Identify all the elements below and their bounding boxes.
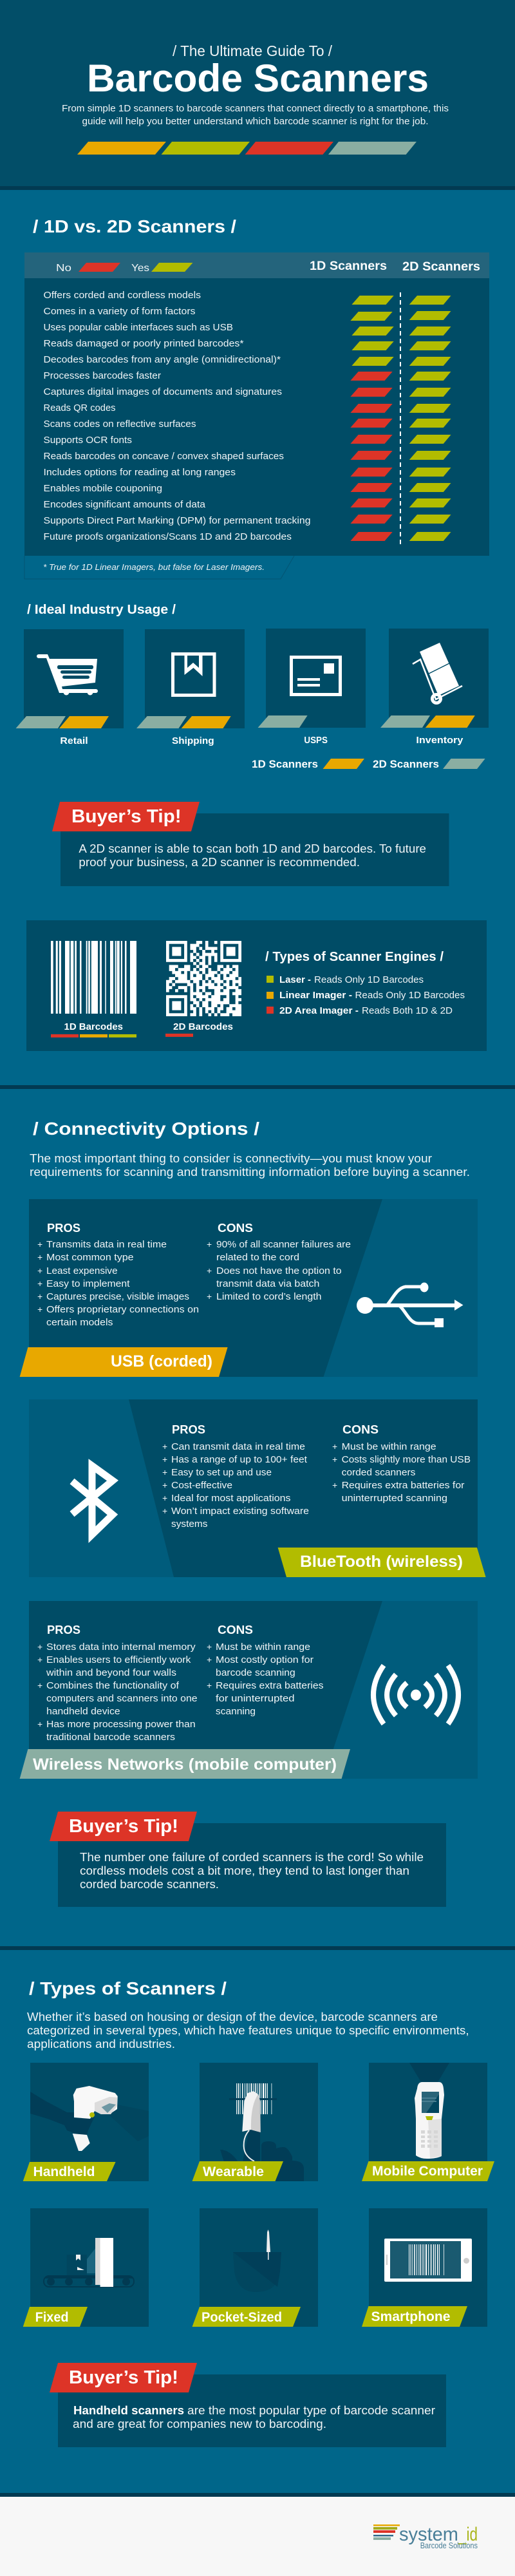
fixed scanner illustration [44,2238,134,2287]
icon: shopping cart [37,654,98,696]
wireless cons: Requires extra batteries [216,1680,323,1691]
card: inventory [380,629,489,746]
icon: USB [357,1283,464,1327]
wireless pros: + [37,1654,42,1665]
engine types: Linear Imager - [279,990,352,1001]
wireless pros: Combines the functionality of [46,1680,180,1691]
wearable scanner illustration [220,2083,304,2181]
feature list: Future proofs organizations/Scans 1D and 2D barcodes [44,531,292,542]
fixed tag [23,2307,88,2327]
barcode labels [51,1021,233,1037]
callout: buyer's tip 2: Buyer’s Tip! [69,1816,178,1837]
Bluetooth pros: + [162,1454,167,1464]
Bluetooth pros: Has a range of up to 100+ feet [171,1454,308,1465]
legend: scanner colours: 1D Scanners [252,758,318,770]
panel: wireless networks [20,1601,478,1779]
wireless cons: + [207,1654,212,1665]
USB pros: Transmits data in real time [46,1239,167,1250]
Bluetooth pros: systems [171,1519,207,1530]
feature list: Processes barcodes faster [44,370,161,381]
USB pros: Captures precise, visible images [46,1291,189,1302]
title: / The Ultimate Guide To / [173,43,333,59]
title: Barcode Scanners [87,57,429,100]
USB tag: USB (corded) [111,1352,212,1370]
1D scanner marks [350,296,394,541]
logo: system_id: _id [458,2524,478,2545]
types intro: categorized in several types, which have features unique to specific environments, [27,2024,469,2037]
engine types: 2D Area Imager - [279,1005,359,1016]
callout: buyer's tip 1: Buyer’s Tip! [71,806,182,827]
mobile computer illustration [409,2063,449,2159]
card: USPS [258,629,366,746]
heading: ideal industry usage: / Ideal Industry Usage / [27,603,176,617]
heading: connectivity: / Connectivity Options / [33,1119,259,1139]
feature list: Encodes significant amounts of data [44,499,206,510]
Bluetooth cons: + [332,1441,337,1452]
panel: USB [20,1199,478,1377]
callout: buyer's tip 3: and are great for companies new to barcoding. [73,2418,326,2430]
feature list: Enables mobile couponing [44,483,162,494]
Bluetooth cons: corded scanners [342,1467,415,1478]
heading: types of scanners: / Types of Scanners / [29,1978,227,1998]
feature list [44,290,310,542]
icon: 1D barcode [51,941,136,1014]
types intro: applications and industries. [27,2038,175,2050]
handheld scanner illustration [30,2086,149,2151]
USB cons: related to the cord [216,1252,299,1263]
wireless pros: + [37,1680,42,1690]
wireless tag: Wireless Networks (mobile computer) [33,1756,337,1774]
types intro: Whether it’s based on housing or design of the device, barcode scanners are [27,2011,438,2023]
callout: buyer's tip 3: Buyer’s Tip! [69,2367,178,2388]
Bluetooth cons: + [332,1480,337,1490]
handheld tag [23,2162,116,2181]
USB cons: + [207,1291,212,1302]
wireless cons [207,1624,323,1717]
USB pros: + [37,1291,42,1302]
panel: Bluetooth [29,1399,486,1577]
feature list: Reads damaged or poorly printed barcodes* [44,338,244,349]
icon: Bluetooth [72,1466,113,1535]
card: inventory: Inventory [416,735,464,746]
feature list: Reads QR codes [44,402,116,413]
header band [0,0,515,190]
feature list: Supports Direct Part Marking (DPM) for permanent tracking [44,515,310,526]
fixed tag: Fixed [35,2310,69,2325]
USB pros: + [37,1278,42,1289]
card: shipping: Shipping [172,735,214,746]
Bluetooth pros: Ideal for most applications [171,1493,291,1504]
table header: Yes [131,263,149,274]
engine types: Laser - [279,974,311,985]
icon: parcel [171,652,216,697]
wireless cons: + [207,1680,212,1690]
engine types: Reads Both 1D & 2D [362,1005,453,1016]
USB cons: 90% of all scanner failures are [216,1239,351,1250]
Bluetooth cons: Costs slightly more than USB [342,1454,471,1465]
callout: buyer's tip 3: Handheld scanners [73,2404,184,2417]
pocket tag [192,2307,301,2327]
wireless cons: Most costly option for [216,1654,314,1665]
engine types: Reads Only 1D Barcodes [355,990,465,1001]
wireless pros: Enables users to efficiently work [46,1654,191,1665]
tags [136,716,231,728]
USB pros: + [37,1239,42,1249]
connectivity intro: The most important thing to consider is connectivity—you must know your [30,1152,432,1165]
USB cons: + [207,1239,212,1249]
Bluetooth cons: + [332,1454,337,1464]
Bluetooth pros: Cost-effective [171,1480,232,1491]
feature list: Captures digital images of documents and signatures [44,386,282,397]
feature list: Offers corded and cordless models [44,290,201,301]
wireless pros: within and beyond four walls [46,1667,176,1678]
tags [380,715,475,728]
footnote [24,556,294,579]
card: shipping [136,629,245,746]
feature list: Comes in a variety of form factors [44,306,196,317]
mobile computer tag: Mobile Computer [372,2164,483,2179]
intro text: From simple 1D scanners to barcode scanners that connect directly to a smartphone, this [62,103,449,114]
connectivity intro [30,1152,470,1179]
wireless cons: Must be within range [216,1642,310,1653]
types intro [27,2011,469,2050]
footnote: * True for 1D Linear Imagers, but false for Laser Imagers. [43,562,265,572]
USB pros: + [37,1252,42,1262]
table header [24,252,489,278]
legend: scanner colours [252,758,485,770]
wireless pros: + [37,1719,42,1729]
pocket scanner illustration [233,2230,281,2292]
callout: buyer's tip 2 [50,1812,446,1907]
callout: buyer's tip 3: are the most popular type of barcode scanner [187,2404,435,2417]
USB pros: certain models [46,1317,113,1328]
wearable tag: Wearable [203,2164,264,2179]
icon: wireless signal [373,1665,458,1724]
colour bars [77,142,417,155]
Bluetooth pros: Easy to set up and use [171,1467,272,1478]
wireless pros: Has more processing power than [46,1719,196,1730]
logo: system_id: Barcode Solutions [420,2541,478,2550]
USB pros: + [37,1304,42,1314]
wireless cons: CONS [218,1624,253,1636]
wireless cons: + [207,1642,212,1652]
panel: comparison table [24,252,489,579]
Bluetooth cons [332,1423,471,1504]
wireless pros: + [37,1642,42,1652]
wireless pros: PROS [47,1624,80,1636]
feature list: Scans codes on reflective surfaces [44,419,196,430]
callout: buyer's tip 1: A 2D scanner is able to scan both 1D and 2D barcodes. To future [79,842,426,855]
Bluetooth tag: BlueTooth (wireless) [300,1553,463,1571]
card: handheld [23,2063,149,2181]
intro text: guide will help you better understand which barcode scanner is right for the job. [82,116,429,127]
icon: hand truck [413,643,462,703]
card: USPS: USPS [304,735,328,746]
card: pocket-sized [192,2208,318,2327]
feature list: Includes options for reading at long ranges [44,467,236,478]
callout: buyer's tip 1 [52,802,449,886]
USB pros: Least expensive [46,1265,118,1276]
wireless pros: Stores data into internal memory [46,1642,196,1653]
Bluetooth pros: + [162,1467,167,1477]
tags [15,716,109,728]
feature list: Uses popular cable interfaces such as USB [44,322,233,333]
Bluetooth pros: + [162,1480,167,1490]
feature list: Decodes barcodes from any angle (omnidirectional)* [44,354,281,365]
connectivity intro: requirements for scanning and transmitting information before buying a scanner. [30,1166,470,1179]
heading: 1D vs 2D: / 1D vs. 2D Scanners / [33,216,236,236]
panel: barcodes and engines [26,920,487,1051]
legend: scanner colours: 2D Scanners [373,758,439,770]
Bluetooth pros: + [162,1441,167,1452]
intro text [62,103,449,127]
USB cons [207,1222,351,1302]
engine types [265,950,465,1016]
USB cons: CONS [218,1222,253,1235]
smartphone tag: Smartphone [371,2309,451,2324]
wireless cons: scanning [216,1706,256,1717]
card: mobile computer [362,2063,494,2181]
smartphone tag [362,2306,467,2327]
Bluetooth pros: Won’t impact existing software [171,1506,309,1517]
table header: No [56,263,71,274]
tag [258,715,308,728]
wireless pros: computers and scanners into one [46,1693,198,1704]
USB pros: PROS [47,1222,80,1235]
USB cons: transmit data via batch [216,1278,319,1289]
pocket tag: Pocket-Sized [201,2310,282,2325]
Bluetooth pros: Can transmit data in real time [171,1441,305,1452]
wireless cons: barcode scanning [216,1667,295,1678]
table header: 1D Scanners [310,260,387,273]
callout: buyer's tip 1: proof your business, a 2D scanner is recommended. [79,856,360,869]
USB cons: Limited to cord’s length [216,1291,322,1302]
USB pros: Offers proprietary connections on [46,1304,199,1315]
Bluetooth cons: CONS [342,1423,379,1436]
USB tag [20,1347,228,1377]
icon: envelope [291,657,340,694]
USB pros: Easy to implement [46,1278,130,1289]
logo: system_id: system [399,2524,458,2545]
Bluetooth pros: + [162,1506,167,1516]
card: smartphone [362,2208,487,2327]
logo: system_id [373,2524,478,2550]
USB pros: + [37,1265,42,1276]
2D scanner marks [409,296,451,541]
USB pros [37,1222,199,1328]
barcode labels: 1D Barcodes [64,1021,123,1032]
callout: buyer's tip 2: cordless models cost a bit more, they tend to last longer than [80,1864,409,1877]
USB cons: + [207,1265,212,1276]
Bluetooth cons: uninterrupted scanning [342,1493,447,1504]
Bluetooth pros [162,1423,309,1530]
callout: buyer's tip 3 [50,2363,446,2447]
footer [0,2493,515,2576]
Bluetooth tag [278,1548,486,1577]
handheld tag: Handheld [33,2164,95,2179]
barcode labels: 2D Barcodes [173,1021,233,1032]
table header: 2D Scanners [402,260,480,274]
card: retail: Retail [60,735,88,746]
wireless pros: traditional barcode scanners [46,1732,175,1743]
Bluetooth pros: PROS [172,1423,205,1436]
wireless pros [37,1624,198,1743]
Bluetooth pros: + [162,1493,167,1503]
smartphone illustration [384,2239,472,2282]
card: retail [15,629,124,746]
USB pros: Most common type [46,1252,134,1263]
feature list: Reads barcodes on concave / convex shaped surfaces [44,451,284,462]
card: fixed [23,2208,149,2327]
engine types: Reads Only 1D Barcodes [314,974,424,985]
callout: buyer's tip 2: corded barcode scanners. [80,1878,219,1891]
Bluetooth cons: Requires extra batteries for [342,1480,464,1491]
Bluetooth cons: Must be within range [342,1441,436,1452]
feature list: Supports OCR fonts [44,435,132,446]
mobile computer tag [362,2161,494,2181]
card: wearable [192,2063,318,2181]
wireless pros: handheld device [46,1706,120,1717]
wireless cons: for uninterrupted [216,1693,295,1704]
icon: QR code [166,942,241,1015]
engine types: / Types of Scanner Engines / [265,950,444,964]
USB cons: Does not have the option to [216,1265,342,1276]
wireless tag [20,1749,350,1779]
wearable tag [192,2161,283,2181]
callout: buyer's tip 2: The number one failure of corded scanners is the cord! So while [80,1851,424,1864]
